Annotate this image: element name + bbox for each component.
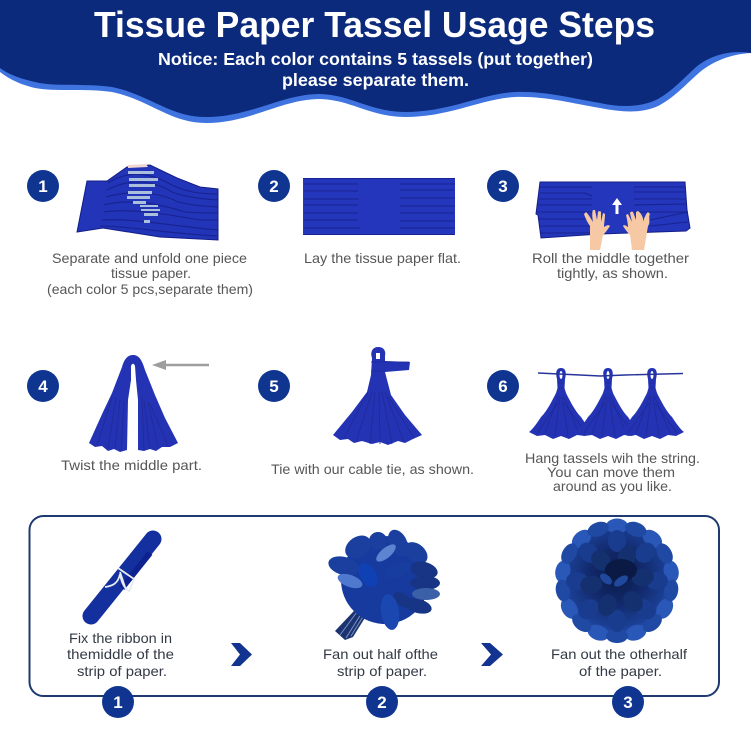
badge 4: 4 xyxy=(38,377,48,396)
illustration: tied tassel xyxy=(333,347,422,445)
badge a xyxy=(102,686,134,718)
illustration: twisted tassel xyxy=(89,355,178,452)
title: Tissue Paper Tassel Usage Steps xyxy=(94,4,655,45)
panel: pom pom steps xyxy=(30,516,719,718)
step 4 xyxy=(27,355,209,473)
left hand xyxy=(584,210,610,250)
caption c: of the paper. xyxy=(579,663,662,679)
badge 3 xyxy=(487,170,519,202)
caption 6: You can move them xyxy=(547,464,675,480)
caption 3: Roll the middle together xyxy=(532,250,689,266)
badge 4 xyxy=(27,370,59,402)
wave fill xyxy=(0,0,751,117)
header banner xyxy=(0,0,751,123)
badge b: 2 xyxy=(377,693,387,712)
notice text: please separate them. xyxy=(282,70,469,90)
string xyxy=(538,373,683,376)
badge 1 xyxy=(27,170,59,202)
arrow pointing to middle xyxy=(152,360,209,370)
caption 6: around as you like. xyxy=(553,478,672,494)
caption c: Fan out the otherhalf xyxy=(551,646,687,662)
photo: fully fanned pom xyxy=(554,518,680,643)
caption 3: tightly, as shown. xyxy=(557,265,668,281)
badge c xyxy=(612,686,644,718)
photo: half fanned pom xyxy=(326,527,440,640)
notice text: Notice: Each color contains 5 tassels (put together) xyxy=(158,49,593,69)
arrow chevron 1 xyxy=(231,643,252,666)
step 1 xyxy=(27,164,253,297)
panel frame xyxy=(30,516,719,696)
badge 1: 1 xyxy=(38,177,48,196)
badge 2 xyxy=(258,170,290,202)
caption a: Fix the ribbon in xyxy=(69,630,172,646)
caption 1: Separate and unfold one piece xyxy=(52,250,247,266)
wave highlight xyxy=(0,0,751,123)
badge 6: 6 xyxy=(498,377,508,396)
caption a: strip of paper. xyxy=(77,663,167,679)
caption 1: (each color 5 pcs,separate them) xyxy=(47,281,253,297)
badge c: 3 xyxy=(623,693,633,712)
photo: folded strip with ribbon xyxy=(91,539,153,616)
step 2 xyxy=(258,170,461,266)
illustration: rolling the paper xyxy=(536,182,690,250)
illustration: unfolding tissue paper xyxy=(77,164,218,240)
step 5 xyxy=(258,347,474,477)
caption b: Fan out half ofthe xyxy=(323,646,438,662)
caption b: strip of paper. xyxy=(337,663,427,679)
badge 5 xyxy=(258,370,290,402)
caption 2: Lay the tissue paper flat. xyxy=(304,250,461,266)
caption 6: Hang tassels wih the string. xyxy=(525,450,700,466)
badge 5: 5 xyxy=(269,377,279,396)
arrow chevron 2 xyxy=(481,643,503,666)
badge b xyxy=(366,686,398,718)
step 3 xyxy=(487,170,690,281)
right hand xyxy=(623,211,650,250)
badge a: 1 xyxy=(113,693,123,712)
badge 3: 3 xyxy=(498,177,508,196)
illustration: flat tissue paper xyxy=(303,178,455,235)
step 6 xyxy=(487,368,700,494)
illustration: tassels on string xyxy=(529,368,684,439)
badge 6 xyxy=(487,370,519,402)
caption 1: tissue paper. xyxy=(111,265,191,281)
badge 2: 2 xyxy=(269,177,279,196)
caption a: themiddle of the xyxy=(67,646,174,662)
caption 5: Tie with our cable tie, as shown. xyxy=(271,461,474,477)
caption 4: Twist the middle part. xyxy=(61,457,202,473)
arrow up xyxy=(612,198,622,214)
